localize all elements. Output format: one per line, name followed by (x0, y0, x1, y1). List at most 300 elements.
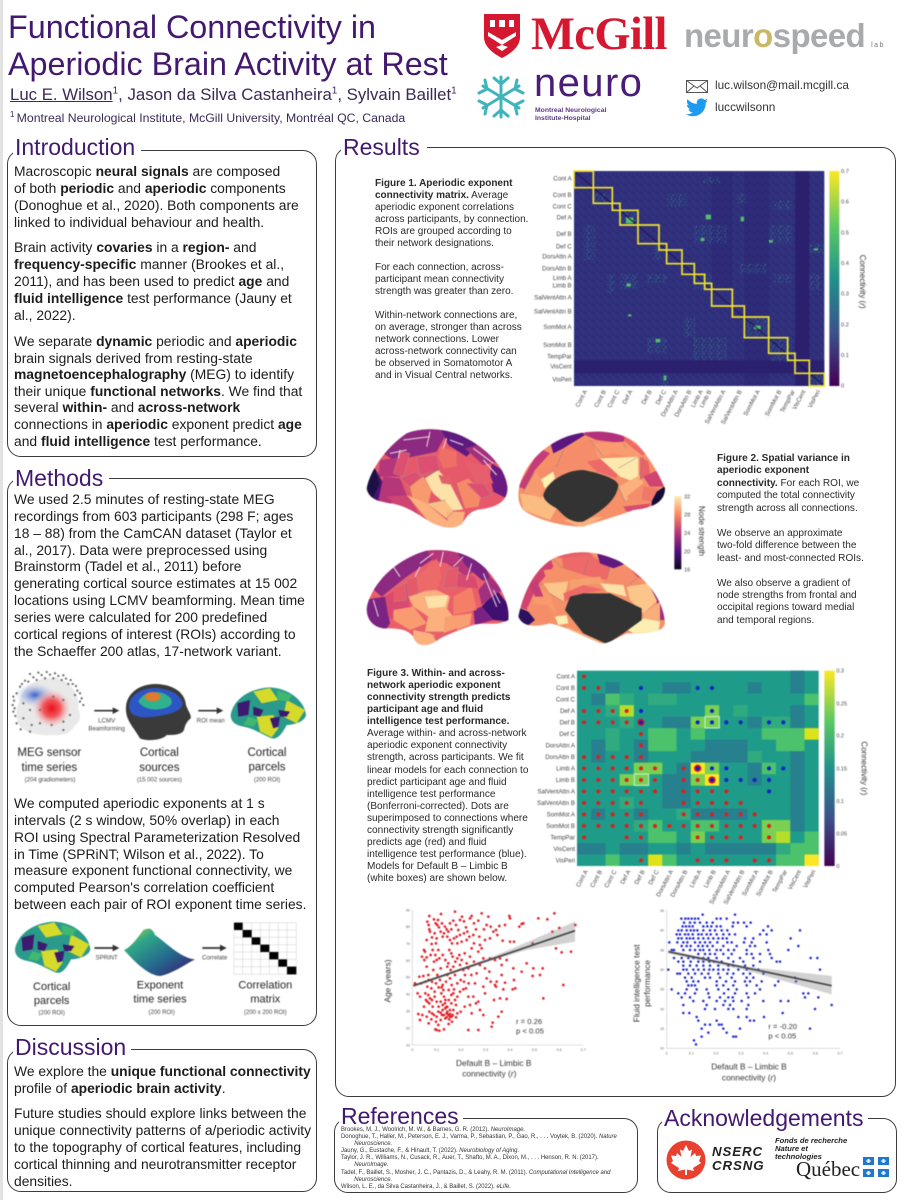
axes: 20 (406, 1026, 410, 1030)
regression line (413, 931, 575, 986)
email address: luc.wilson@mail.mcgill.ca (715, 78, 849, 92)
y axis label: Age (years) (383, 959, 393, 1003)
colour bar: 0.7 (841, 169, 849, 175)
axes: 90 (406, 908, 410, 912)
axes (406, 908, 586, 1052)
x axis labels: Limb A (688, 868, 704, 889)
text: introduction paragraph 3: their unique functional networks. We find that (14, 383, 302, 399)
text: figure 2 caption: occipital regions toward medial (717, 602, 854, 613)
colour bar: 0.05 (836, 831, 847, 837)
text: methods paragraph 2: measure exponent functional connectivity, we (14, 862, 292, 878)
x axis labels: Limb A (690, 388, 705, 409)
blue dots: fluid intelligence (641, 688, 783, 791)
text: figure 3 caption: strength, across participants. We fit (367, 752, 524, 763)
logo: Fonds de recherche Québec: Nature et (775, 1144, 808, 1153)
text: methods paragraph 2: We computed aperiodic exponents at 1 s (14, 795, 265, 811)
panel: acknowledgements (657, 1105, 897, 1193)
title (8, 9, 448, 82)
axes: 60 (406, 959, 410, 963)
text: methods paragraph 2: between each pair of ROI exponent time series. (14, 896, 306, 912)
colour bar (674, 494, 706, 574)
text: discussion paragraph 2: densities. (14, 1173, 72, 1189)
text: figure 1 caption: For each connection, across- (375, 262, 504, 273)
y axis labels: Def A (560, 708, 576, 715)
icon: MEG head with sensors (13, 672, 83, 735)
text: figure 3 caption: network aperiodic exponent (367, 680, 500, 691)
x axis labels: Cont C (606, 388, 622, 409)
x axis label (456, 1058, 532, 1079)
y axis labels: SomMot A (547, 811, 576, 818)
text: figure 1 caption: their network designations. (375, 238, 494, 249)
text: discussion paragraph 1: We explore the unique functional connectivity (14, 1063, 311, 1079)
text: figure 1 caption: Within-network connections are, (375, 310, 517, 321)
label: correlation matrix (238, 979, 292, 1016)
text: figure 2 caption: least- and most-connected ROIs. (717, 553, 864, 564)
text: methods paragraph 1 (14, 491, 305, 659)
colour bar: 0.6 (841, 200, 849, 206)
label: cortical parcels: parcels (248, 761, 286, 773)
text: figure 3 caption: linear models for each connection to (367, 764, 528, 776)
x axis labels: SalVentAttn B (720, 389, 744, 426)
x axis labels: DorsAttn A (655, 868, 676, 898)
text: methods paragraph 2 (14, 795, 306, 912)
axes: 10 (406, 1043, 410, 1047)
x axis labels: Def C (647, 869, 661, 886)
heading: methods: Methods (15, 465, 103, 491)
arrow: correlate: Correlate (202, 954, 228, 961)
arrow: LCMV beamforming: Beamforming (88, 725, 126, 732)
text: methods paragraph 1: cortical regions of interest (ROIs) according to (14, 626, 296, 642)
x axis labels: VisCent (787, 869, 803, 891)
network boxes (574, 171, 824, 386)
colour bar: 20 (684, 549, 690, 555)
axes: 0.2 (713, 1051, 719, 1055)
points (668, 915, 832, 1044)
diagram: MEG processing pipeline (11, 670, 307, 784)
text: reference list: Donoghue, T., Haller, M., Peterson, E. J., Varma, P., Sebastian, P., Gao, R., . . . Voytek, B. (2020). Nature (341, 1134, 617, 1140)
text: figure 2 caption: strength across all connections. (717, 503, 858, 514)
chart: age vs connectivity scatter (383, 908, 586, 1079)
text: reference list: Jauny, G., Eustache, F., & Hinault, T. (2022). Neurobiology of Aging. (341, 1148, 519, 1154)
x axis labels: Cont A (575, 868, 590, 889)
axes: 30 (660, 968, 664, 972)
text: figure 2 caption: node strengths from frontal and (717, 590, 857, 601)
label: cortical sources: sources (139, 762, 180, 774)
logo: Fonds de recherche Québec: Fonds de recherche (775, 1136, 847, 1145)
text: figure 3 caption: Figure 3. Within- and across- (367, 668, 505, 679)
logo: NSERC CRSNG: CRSNG (712, 1158, 765, 1172)
y axis labels: Def A (557, 214, 573, 221)
x axis labels: Limb B (698, 389, 713, 409)
heatmap cells (577, 671, 819, 866)
y axis labels: SalVentAttn A (534, 294, 573, 301)
label: MEG sensor time series (17, 747, 81, 783)
text: figure 2 caption (717, 453, 864, 626)
logo: McGill: McGill (531, 9, 667, 60)
arrow: SPRiNT: SPRiNT (96, 954, 118, 961)
colour bar: 32 (684, 494, 690, 500)
axes: 30 (406, 1010, 410, 1014)
text: figure 3 caption: Average within- and across-network (367, 728, 527, 739)
text: methods paragraph 1: series were calculated for 200 predefined (14, 609, 267, 625)
x axis labels: SomMot A (741, 868, 761, 897)
text: figure 1 caption: on average, stronger than across (375, 322, 522, 333)
logo: neuro wordmark: Institute-Hospital (535, 115, 591, 122)
regression band (413, 922, 575, 987)
logo: Fonds de recherche Québec (775, 1136, 889, 1181)
text: figure 2 caption: We also observe a gradient of (717, 578, 850, 589)
label: cortical sources: (15 002 sources) (137, 777, 182, 783)
text: figure 2 caption: computed the total connectivity (717, 490, 855, 501)
text: introduction paragraph 2: frequency-specific manner (Brookes et al., (14, 256, 284, 272)
text: introduction paragraph 1 (14, 163, 299, 230)
x axis labels: TempPar (779, 389, 797, 414)
stats: r = 0.26 (516, 1017, 542, 1026)
y axis labels: SalVentAttn B (534, 308, 572, 315)
x axis labels: Limb B (703, 869, 718, 889)
text: figure 2 caption: and temporal regions. (717, 615, 814, 626)
x axis labels: VisPeri (807, 389, 822, 409)
heading: acknowledgements: Acknowledgements (664, 1105, 863, 1131)
x axis labels: SalVentAttn B (722, 869, 746, 906)
text: figure 1 caption: aperiodic exponent correlations (375, 202, 514, 213)
red dots: age (584, 676, 769, 860)
axes: 0 (666, 1051, 668, 1055)
y axis labels: Def C (559, 731, 576, 738)
text: introduction paragraph 2: al., 2022). (14, 307, 76, 323)
text: reference list: Brookes, M. J., Woolrich, M. W., & Barnes, G. R. (2012). NeuroImage. (341, 1127, 525, 1133)
logo: neurospeed lab: neurospeed lab (684, 17, 885, 54)
icon: head with cortical sources (126, 684, 191, 740)
text: reference list: Wilson, L. E., da Silva Castanheira, J., & Baillet, S. (2022). eLife. (341, 1184, 511, 1190)
label: MEG sensor time series: MEG sensor (17, 747, 81, 759)
brain: medial top (515, 427, 668, 530)
colour bar: 0 (841, 384, 844, 390)
label: cortical parcels: Cortical (33, 981, 70, 993)
x axis labels: Def B (640, 389, 654, 406)
text: introduction paragraph 3: several within- and across-network (14, 399, 240, 415)
logo: neuro wordmark: neuro (534, 61, 643, 105)
y axis labels: Cont B (553, 192, 572, 199)
label: correlation matrix: Correlation (238, 979, 292, 991)
text: introduction paragraph 2 (14, 239, 292, 323)
x axis labels: VisCent (791, 389, 808, 411)
colour bar: 24 (684, 531, 690, 537)
x axis labels: TempPar (771, 869, 789, 894)
y axis labels: SomMot A (543, 324, 573, 331)
label: cortical parcels: Cortical (248, 747, 286, 759)
y axis label (631, 944, 652, 1022)
y axis labels: VisPeri (556, 857, 575, 864)
y axis label: performance (642, 960, 652, 1007)
x axis label: Default B – Limbic B (711, 1062, 787, 1072)
label: cortical sources (137, 747, 182, 783)
x axis labels: Def A (619, 868, 633, 886)
icon: exponent time series surface (124, 929, 195, 976)
y axis labels: Def B (560, 719, 575, 726)
stats (768, 1022, 797, 1040)
regression band (668, 950, 832, 994)
logo: neuro snowflake (477, 76, 525, 118)
axes: 0.7 (837, 1051, 843, 1055)
label: cortical parcels: (200 ROI) (254, 777, 280, 783)
text: figure 1 caption: participant mean connectivity (375, 274, 504, 285)
colour bar: 0.1 (841, 353, 849, 359)
text: figure 3 caption (367, 668, 528, 884)
axes: 0.6 (556, 1048, 562, 1052)
left page edge (0, 0, 3, 1200)
label: MEG sensor time series: (204 gradiometers) (25, 777, 75, 783)
brain: lateral top (363, 425, 510, 532)
y axis labels: DorsAttn A (546, 742, 576, 749)
arrow: LCMV beamforming: LCMV (98, 717, 116, 724)
arrow: SPRiNT (94, 945, 119, 961)
x axis labels: Cont B (589, 869, 604, 889)
x axis labels: Cont A (574, 388, 590, 409)
axes: 10 (660, 1047, 664, 1051)
colour bar: Node strength (697, 506, 706, 556)
x axis labels (575, 868, 817, 906)
text: reference list: Tadel, F., Baillet, S., Mosher, J. C., Pantazis, D., & Leahy, R. M. (2011). Computational Intelligence and (341, 1170, 610, 1176)
text: figure 2 caption: We observe an approximate (717, 528, 842, 539)
label: exponent time series: time series (133, 993, 187, 1005)
y axis labels: Cont C (556, 696, 576, 703)
y axis labels: Limb B (553, 283, 572, 290)
text: discussion paragraph 2: cortical thinning and neurotransmitter receptor (14, 1156, 296, 1172)
text: figure 3 caption: predict participant age and fluid (367, 777, 507, 788)
text: figure 3 caption: (white boxes) are shown below. (367, 873, 507, 884)
colour bar: 0.1 (836, 799, 844, 805)
y axis labels: VisPeri (552, 376, 572, 383)
points (415, 912, 575, 1031)
y axis labels: Limb A (556, 765, 576, 772)
panel: results (335, 134, 896, 1097)
colour bar: 0.4 (841, 261, 849, 267)
stats (516, 1017, 544, 1035)
colour bar: 16 (684, 568, 690, 574)
panel: discussion (7, 1034, 317, 1192)
x axis labels: DorsAttn B (673, 389, 693, 418)
y axis labels: Def C (556, 243, 572, 250)
text: figure 1 caption: ROIs are grouped according to (375, 226, 512, 237)
y axis labels: Def B (556, 231, 572, 238)
y axis labels (537, 673, 576, 864)
text: figure 3 caption: aperiodic exponent connectivity (367, 740, 507, 751)
icon: twitter bird (686, 98, 708, 116)
y axis labels: Cont B (556, 685, 575, 692)
logo: neuro wordmark: Montreal Neurological (535, 107, 606, 114)
text: methods paragraph 2: in Time (SPRiNT; Wilson et al., 2022). To (14, 846, 264, 862)
text: methods paragraph 1: 18 – 88) from the CamCAN dataset (Taylor et (14, 525, 292, 541)
text: methods paragraph 2: computed Pearson's correlation coefficient (14, 879, 274, 895)
axes: 80 (406, 925, 410, 929)
icon: cortical parcels brain (231, 687, 306, 739)
x axis labels: SomMot B (764, 389, 783, 418)
text: introduction paragraph 3 (14, 333, 302, 449)
stats: p < 0.05 (768, 1031, 796, 1040)
chart: figure 2 cortical node strength maps (366, 428, 706, 646)
x axis label: connectivity (r) (462, 1069, 517, 1079)
text: discussion paragraph 2 (14, 1105, 311, 1189)
text: figure 3 caption: intelligence test performance. (367, 716, 509, 727)
colour bar: 0 (836, 864, 839, 870)
text: reference list (341, 1126, 617, 1190)
colour bar: 0.5 (841, 230, 849, 236)
icon: cortical parcels brain (15, 922, 90, 973)
text: figure 3 caption: Models for Default B – Limbic B (367, 861, 508, 872)
axes: 0.3 (483, 1048, 488, 1052)
text: introduction paragraph 1: Macroscopic neural signals are composed (14, 163, 280, 179)
x axis labels (574, 388, 822, 426)
label: correlation matrix: matrix (250, 993, 281, 1005)
y axis labels: Limb A (553, 275, 573, 282)
heading: introduction: Introduction (15, 134, 135, 160)
axes: 0.4 (507, 1048, 513, 1052)
heading: references: References (341, 1103, 459, 1129)
y axis labels: Cont A (553, 176, 573, 183)
text: figure 1 caption: connectivity matrix. Average (375, 190, 508, 201)
axes: 0.7 (581, 1048, 586, 1052)
heatmap cells (574, 171, 824, 386)
icon: correlation matrix (234, 923, 296, 974)
x axis labels: SalVentAttn A (708, 868, 733, 906)
text: methods paragraph 2: intervals (2 s window, 50% overlap) in each (14, 812, 279, 828)
axes: 0 (411, 1048, 413, 1052)
axes (660, 909, 843, 1055)
colour bar: 0.3 (841, 292, 849, 298)
text: methods paragraph 1: recordings from 603 participants (298 F; ages (14, 508, 293, 524)
text: figure 2 caption: connectivity. For each ROI, we (717, 478, 859, 489)
text: reference list: NeuroImage. (354, 1162, 389, 1168)
text: figure 2 caption: Figure 2. Spatial variance in (717, 453, 850, 464)
chart: figure 3 network connectivity matrix (536, 668, 869, 906)
text: figure 2 caption: aperiodic exponent (717, 465, 809, 476)
x axis labels: DorsAttn A (660, 388, 680, 418)
axes: 0.1 (434, 1048, 439, 1052)
colour bar: Connectivity ( r ) (860, 741, 869, 796)
label: exponent time series (133, 979, 187, 1016)
colour bar: 0.15 (836, 766, 847, 772)
text: figure 1 caption: network connections. Lower (375, 334, 499, 345)
colour bar: 28 (684, 513, 690, 519)
y axis labels: Limb B (556, 777, 575, 784)
twitter handle: luccwilsonn (715, 100, 775, 114)
text: introduction paragraph 2: Brain activity covaries in a region- and (14, 239, 256, 255)
y axis labels: TempPar (550, 834, 575, 841)
diagram: exponent correlation pipeline (14, 920, 298, 1017)
colour bar: 0.3 (836, 669, 844, 675)
text: reference list: Neuroscience. (354, 1177, 392, 1183)
y axis labels: DorsAttn B (545, 754, 575, 761)
label: cortical sources: Cortical (140, 747, 179, 759)
axes: 0.5 (532, 1048, 537, 1052)
heading: results: Results (343, 134, 420, 160)
text: methods paragraph 1: We used 2.5 minutes of resting-state MEG (14, 491, 275, 507)
text: figure 1 caption: be observed in Somatomotor A (375, 358, 512, 369)
x axis labels: DorsAttn B (669, 869, 689, 899)
colour bar (829, 169, 867, 390)
x axis labels: VisPeri (802, 869, 817, 889)
axes: 40 (660, 929, 664, 933)
authors: Luc E. Wilson1, Jason da Silva Castanheira1, Sylvain Baillet1 (10, 85, 457, 104)
text: figure 3 caption: (Bonferroni-corrected). Dots are (367, 801, 509, 812)
text: reference list: Taylor, J. R., Williams, N., Cusack, R., Auer, T., Shafto, M. A., Dixon, M., . . . Henson, R. N. (2017). (341, 1155, 599, 1161)
panel: references (334, 1103, 638, 1193)
text: methods paragraph 1: Brainstorm (Tadel et al., 2011) before (14, 558, 242, 574)
text: introduction paragraph 3: connections in aperiodic exponent predict age (14, 416, 302, 432)
title: Functional Connectivity in (8, 9, 376, 45)
y axis labels: Cont A (557, 673, 576, 680)
x axis labels: SomMot A (742, 388, 762, 417)
axes: 0.2 (458, 1048, 464, 1052)
text: introduction paragraph 1: of both periodic and aperiodic components (14, 180, 286, 196)
colour bar (824, 669, 869, 870)
arrow: ROI mean: ROI mean (197, 717, 225, 724)
y axis label: Fluid intelligence test (631, 944, 641, 1022)
text: methods paragraph 1: the Schaeffer 200 atlas, 17-network variant. (14, 643, 282, 659)
chart: figure 1 connectivity matrix (534, 168, 867, 426)
y axis labels: SomMot B (543, 342, 572, 349)
stats: r = -0.20 (768, 1022, 797, 1031)
y axis labels (534, 176, 573, 383)
x axis labels: SalVentAttn A (704, 388, 728, 425)
axes: 0.5 (788, 1051, 793, 1055)
chart: fluid intelligence vs connectivity scatter (631, 909, 843, 1083)
axes: 25 (660, 988, 664, 992)
brain: lateral bottom (363, 547, 512, 650)
text: figure 2 caption: two-fold difference between the (717, 540, 856, 551)
x axis labels: Cont C (603, 869, 619, 889)
text: figure 1 caption: strength was greater than zero. (375, 286, 513, 297)
text: introduction paragraph 1: (Donoghue et al., 2020). Both components are (14, 197, 299, 213)
text: introduction paragraph 3: magnetoencephalography (MEG) to identify (14, 366, 294, 382)
logo: Fonds de recherche Québec: Québec (796, 1157, 860, 1181)
label: exponent time series: Exponent (137, 979, 183, 991)
label: correlation matrix: (200 x 200 ROI) (244, 1010, 287, 1016)
axes: 0.3 (738, 1051, 744, 1055)
axes: 0.4 (763, 1051, 768, 1055)
text: introduction paragraph 1: linked to individual behaviour and health. (14, 214, 264, 230)
colour bar: 0.25 (836, 701, 847, 707)
text: figure 3 caption: intelligence test performance (367, 789, 495, 800)
colour bar: 0.2 (836, 734, 844, 740)
text: figure 1 caption: and in Visual Central networks. (375, 370, 513, 381)
arrow: ROI mean (197, 707, 225, 724)
label: cortical parcels (248, 747, 286, 783)
text: figure 1 caption: Figure 1. Aperiodic exponent (375, 178, 512, 189)
text: introduction paragraph 2: fluid intelligence test performance (Jauny et (14, 290, 292, 306)
y axis labels: DorsAttn A (542, 253, 573, 260)
arrow: LCMV beamforming (88, 707, 126, 732)
logo: NSERC CRSNG (666, 1140, 765, 1180)
y axis labels: SomMot B (546, 823, 575, 830)
heading: discussion: Discussion (15, 1034, 126, 1060)
text: figure 3 caption: intelligence test performance (blue). (367, 849, 527, 860)
x axis labels: SomMot B (755, 869, 775, 898)
axes: 0.1 (689, 1051, 694, 1055)
large red dots (641, 722, 712, 780)
label: exponent time series: (200 ROI) (148, 1010, 175, 1016)
y axis labels: Cont C (553, 203, 572, 210)
text: discussion paragraph 2: unique connectivity patterns of a/periodic activity (14, 1122, 311, 1138)
regression line (668, 952, 832, 986)
text: methods paragraph 1: al., 2017). Data were preprocessed using (14, 542, 267, 558)
brain: medial bottom (515, 548, 668, 647)
text: figure 3 caption: participant age and fluid (367, 704, 483, 715)
logo: NSERC CRSNG: NSERC (712, 1144, 763, 1159)
x axis label: Default B – Limbic B (456, 1058, 532, 1068)
panel: methods (7, 465, 317, 1026)
